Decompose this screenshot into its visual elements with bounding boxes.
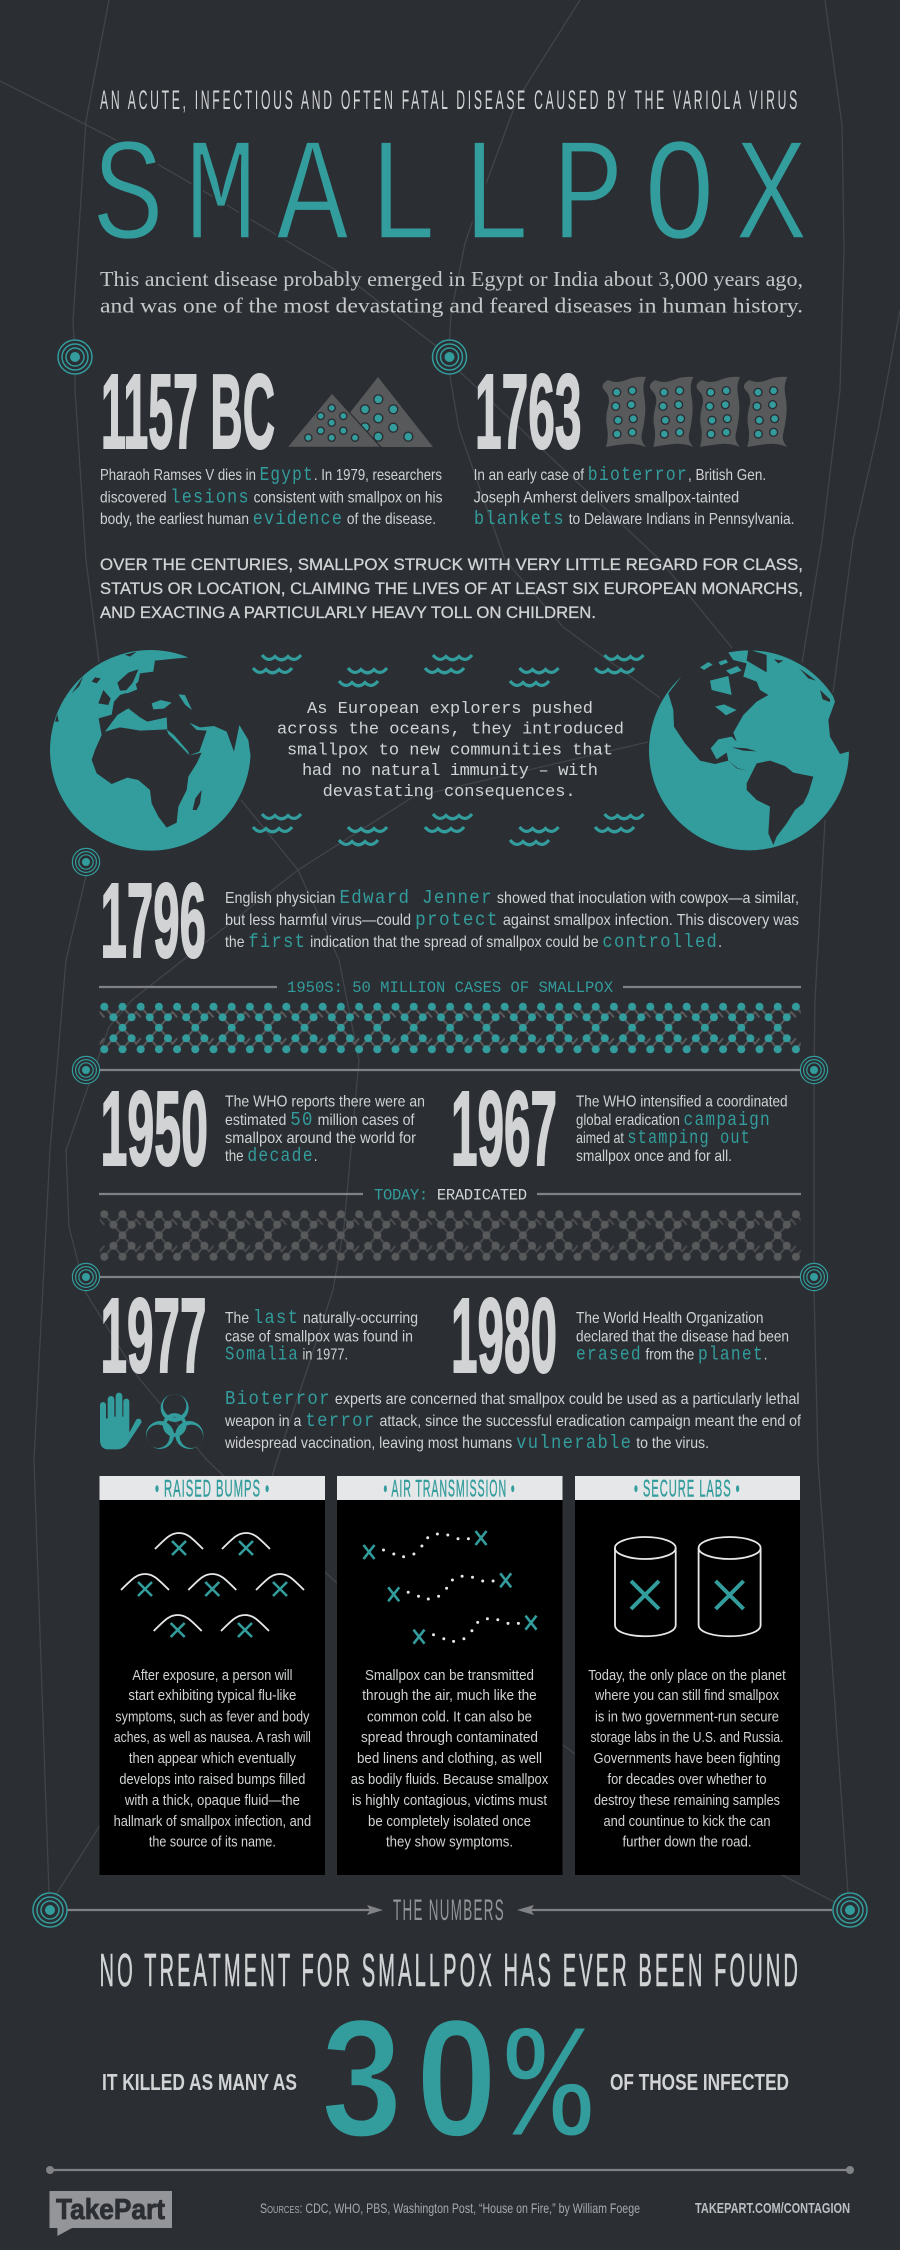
text: 1763: Joseph Amherst delivers smallpox-tainted [474,490,739,506]
text: european explorers: had no natural immunity – with [302,762,598,781]
text: 1980 [576,1310,789,1366]
text: 1763: blankets to Delaware Indians in Pennsylvania. [474,508,794,530]
text: 1157 BC: discovered lesions consistent with smallpox on his [100,486,442,508]
icon: sample canisters [615,1537,761,1636]
text: 1950: smallpox around the world for [225,1130,417,1147]
panel text: aches, as well as nausea. A rash will [114,1729,311,1746]
text: 1950 [225,1094,425,1167]
text: bioterror: weapon in a terror attack, since the successful eradication campaign meant the end of [224,1410,801,1432]
text: 1157 BC: body, the earliest human evidence of the disease. [100,508,436,530]
panel text: common cold. It can also be [367,1708,532,1726]
panel text: further down the road. [622,1834,752,1850]
statement: over the centuries: STATUS OR LOCATION, CLAIMING THE LIVES OF AT LEAST SIX EUROPEAN MONARCHS, [100,579,803,598]
text: 1157 BC [101,353,275,471]
waves: below text [253,814,644,845]
panel text: start exhibiting typical flu-like [128,1687,296,1704]
statement: over the centuries: OVER THE CENTURIES, SMALLPOX STRUCK WITH VERY LITTLE REGARD FOR CLASS, [100,555,803,574]
statistic: 30 percent: % [505,1999,592,2186]
panel text: then appear which eventually [129,1750,296,1767]
lattice: 50 million cases [100,1002,801,1054]
panel text: is highly contagious, victims must [352,1792,548,1809]
waves: above text [253,655,644,686]
panel: air transmission: • AIR TRANSMISSION • [384,1476,516,1502]
panel text: for decades over whether to [608,1771,766,1788]
text: 1763: In an early case of bioterror, British Gen. [474,464,766,486]
heading: 1950s: 1950S: 50 MILLION CASES OF SMALLPOX [287,979,614,997]
panel: secure labs: • SECURE LABS • [634,1476,740,1502]
icon: hand [100,1393,142,1449]
text: 1977 [100,1277,206,1395]
text: 1763 [475,353,582,471]
panel text: is in two government-run secure [595,1708,779,1726]
text: 1950: estimated 50 million cases of [225,1109,415,1131]
text: 1977 [225,1307,418,1366]
text: 1980: erased from the planet. [576,1344,768,1366]
beacon: 1763 [432,340,467,374]
panel text: bed linens and clothing, as well [357,1750,542,1767]
logo: TakePart: TakePart [56,2194,165,2226]
text: 1796: English physician Edward Jenner showed that inoculation with cowpox—a similar, [225,887,799,909]
text: european explorers: across the oceans, they introduced [277,720,624,740]
statement: over the centuries: AND EXACTING A PARTICULARLY HEAVY TOLL ON CHILDREN. [100,603,596,622]
intro paragraph: This ancient disease probably emerged in Egypt or India about 3,000 years ago, [100,267,803,291]
panel text: destroy these remaining samples [594,1792,780,1809]
text: 1967 [451,1070,557,1188]
panel: raised bumps: • RAISED BUMPS • [155,1476,270,1502]
panel text: spread through contaminated [361,1729,538,1746]
text: 1967: smallpox once and for all. [576,1148,732,1165]
panel text [351,1667,549,1850]
panel text: Today, the only place on the planet [588,1667,786,1684]
panel text: with a thick, opaque fluid—the [124,1792,300,1809]
text: 1967: aimed at stamping out [576,1127,751,1149]
divider with beacons [72,1056,828,1084]
text: european explorers: smallpox to new communities that [287,742,613,760]
footer rule [46,2166,854,2174]
globe: the Americas [649,649,867,850]
text: 1977: The last naturally-occurring [225,1307,418,1329]
statistic: 30 percent: 30 [321,1984,497,2172]
section heading: the numbers with arrows: THE NUMBERS [393,1894,505,1927]
text: bioterror: Bioterror experts are concerned that smallpox could be used as a particularly lethal [225,1388,800,1410]
icon: infected blankets [603,377,787,447]
text: 1980: The World Health Organization [576,1310,764,1327]
sources: Sources: CDC, WHO, PBS, Washington Post, “House on Fire,” by William Foege [260,2200,640,2216]
panel: air transmission [337,1476,562,1875]
text: 1796: the first indication that the spread of smallpox could be controlled. [225,931,722,953]
text: 1157 BC: Pharaoh Ramses V dies in Egypt. In 1979, researchers [100,464,442,486]
panel text [114,1667,311,1850]
intro paragraph [100,267,803,318]
globe: Europe and Africa [50,650,273,851]
icon: droplets travelling [364,1531,536,1644]
section heading: the numbers with arrows [32,1892,868,1928]
text: 1950: the decade. [225,1145,318,1167]
text: 1967: The WHO intensified a coordinated [576,1094,788,1110]
panel: raised bumps [100,1476,325,1875]
text: 1980: declared that the disease had been [576,1328,789,1346]
panel text: through the air, much like the [362,1687,537,1704]
title: SMALLPOX: SMALLPOX [92,117,808,283]
icon: bumps [121,1533,304,1637]
icon: pox pyramids [287,377,433,447]
intro paragraph: and was one of the most devastating and feared diseases in human history. [100,294,803,318]
text: 1967 [576,1094,788,1165]
panel text: hallmark of smallpox infection, and [114,1813,311,1830]
text: 1157 BC [100,464,442,530]
text: european explorers: devastating consequences. [323,783,576,802]
text: european explorers [277,700,624,802]
heading: today eradicated: TODAY: ERADICATED [374,1186,527,1204]
panel text: After exposure, a person will [132,1667,292,1684]
panel text: where you can still find smallpox [594,1687,779,1704]
text: 1796 [225,887,799,953]
panel text: develops into raised bumps filled [119,1771,305,1788]
text: bioterror: widespread vaccination, leaving most humans vulnerable to the virus. [224,1432,709,1454]
logo: TakePart [50,2191,172,2236]
panel text: they show symptoms. [386,1834,513,1850]
panel text: symptoms, such as fever and body [115,1708,310,1726]
text: 1763 [474,464,794,530]
statistic: 30 percent: IT KILLED AS MANY AS [102,2069,297,2095]
statistic: 30 percent [102,1984,789,2186]
text: 1950: The WHO reports there were an [225,1094,425,1110]
panel text: as bodily fluids. Because smallpox [351,1771,549,1788]
panel text: Smallpox can be transmitted [365,1667,534,1684]
text: 1977: Somalia in 1977. [225,1344,348,1366]
statement: over the centuries [100,555,803,622]
lattice: eradicated [100,1210,801,1262]
text: european explorers: As European explorers pushed [307,700,593,719]
panel text: the source of its name. [149,1834,276,1850]
text: 1967: global eradication campaign [576,1109,771,1131]
statistic: 30 percent: OF THOSE INFECTED [610,2069,789,2095]
beacon: 1796 [72,848,100,876]
panel text: storage labs in the U.S. and Russia. [590,1729,784,1746]
panel text: and countinue to kick the can [604,1813,770,1830]
panel: secure labs [575,1476,800,1875]
text: 1796 [100,862,206,980]
beacon: 1157 BC [58,340,92,374]
panel text [588,1667,786,1850]
divider with beacons [72,1263,828,1291]
icon: biohazard [146,1394,203,1449]
text: 1796: but less harmful virus—could protect against smallpox infection. This discovery was [225,909,799,931]
text: bioterror [224,1388,801,1454]
panel text: be completely isolated once [368,1813,531,1830]
text: 1977: case of smallpox was found in [225,1328,413,1346]
panel text: Governments have been fighting [594,1750,780,1767]
text: 1950 [100,1070,208,1188]
text: 1980 [451,1277,557,1395]
